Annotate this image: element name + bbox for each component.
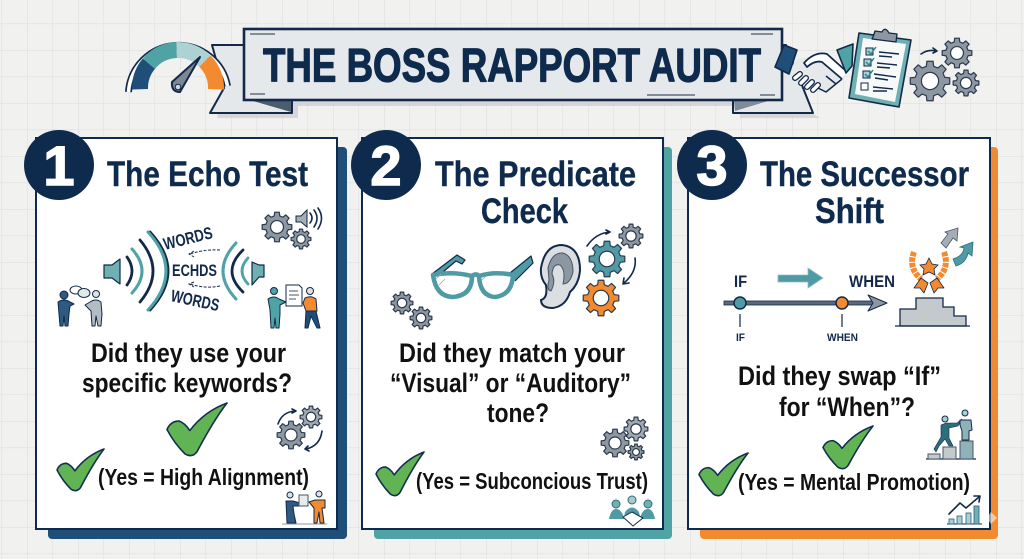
question text: tone? — [487, 398, 549, 428]
banner left tail — [210, 45, 292, 113]
yes outcome text: (Yes = Subconcious Trust) — [416, 468, 648, 494]
question text — [82, 338, 292, 398]
question text: specific keywords? — [82, 368, 292, 398]
icon: people with puzzle — [282, 491, 327, 524]
icon: upward arrows — [941, 228, 973, 266]
badge number 1: 1 — [43, 134, 75, 197]
icon: growth chart — [947, 496, 982, 524]
if to when labels and arrow: IF — [734, 272, 747, 291]
question text — [738, 361, 941, 422]
icon: clipboard checklist — [849, 29, 911, 107]
icon: check mark — [376, 452, 424, 496]
illustration: echo speakers — [104, 223, 264, 315]
banner right tail — [733, 45, 813, 113]
icon: gears with arrows — [277, 406, 322, 451]
question text: Did they use your — [91, 338, 286, 368]
heading: Check — [481, 192, 568, 231]
panel 2: the predicate check — [351, 130, 672, 539]
icon: team handshake — [609, 496, 655, 526]
illustration: echo speakers: WORDS — [161, 223, 214, 254]
question text: for “When”? — [779, 392, 915, 422]
icon: three process gears — [583, 224, 643, 316]
badge number 1 — [24, 130, 94, 200]
badge number 3: 3 — [696, 134, 728, 197]
panel 1: the echo test — [24, 130, 347, 539]
icon: small grey gears — [391, 292, 432, 329]
heading: The Echo Test — [107, 155, 308, 194]
heading: Shift — [815, 192, 884, 231]
heading — [760, 155, 969, 231]
title banner — [210, 29, 820, 118]
icon: gauge — [128, 45, 228, 92]
heading — [435, 155, 636, 231]
illustration: echo speakers: WORDS — [169, 286, 221, 315]
icon: check mark large — [823, 426, 873, 469]
icon: header gears — [910, 38, 979, 101]
icon: handshake — [775, 44, 853, 92]
timeline — [724, 295, 887, 344]
icon: podium with laurel — [895, 252, 970, 326]
panel 3: the successor shift — [677, 130, 998, 539]
main title: THE BOSS RAPPORT AUDIT — [263, 38, 761, 92]
icon: small check mark — [57, 449, 104, 491]
banner main ribbon — [244, 29, 782, 100]
if to when labels and arrow: WHEN — [849, 272, 895, 291]
illustration: glasses — [432, 255, 533, 297]
heading: The Successor — [760, 155, 969, 194]
timeline: WHEN — [827, 332, 858, 344]
heading: The Predicate — [435, 155, 636, 194]
illustration: ear — [541, 245, 580, 308]
badge number 2: 2 — [370, 134, 402, 197]
icon: large check mark — [167, 403, 227, 456]
if to when labels and arrow — [734, 268, 895, 291]
icon: climbing steps — [926, 410, 976, 459]
icon: two people talking — [58, 286, 102, 326]
badge number 3 — [677, 130, 747, 200]
icon: two people with document — [268, 285, 320, 328]
yes outcome text: (Yes = Mental Promotion) — [738, 469, 970, 495]
icon: check mark small — [699, 453, 748, 496]
question text: “Visual” or “Auditory” — [390, 368, 631, 398]
icon: cluster of gears — [601, 417, 648, 460]
illustration: echo speakers: ECHDS — [172, 262, 217, 280]
icon: gears and speaker — [262, 208, 322, 249]
badge number 2 — [351, 130, 421, 200]
timeline: IF — [736, 332, 745, 344]
question text: Did they match your — [399, 338, 625, 368]
question text: Did they swap “If” — [738, 361, 941, 391]
yes outcome text: (Yes = High Alignment) — [98, 464, 309, 490]
question text — [390, 338, 631, 428]
